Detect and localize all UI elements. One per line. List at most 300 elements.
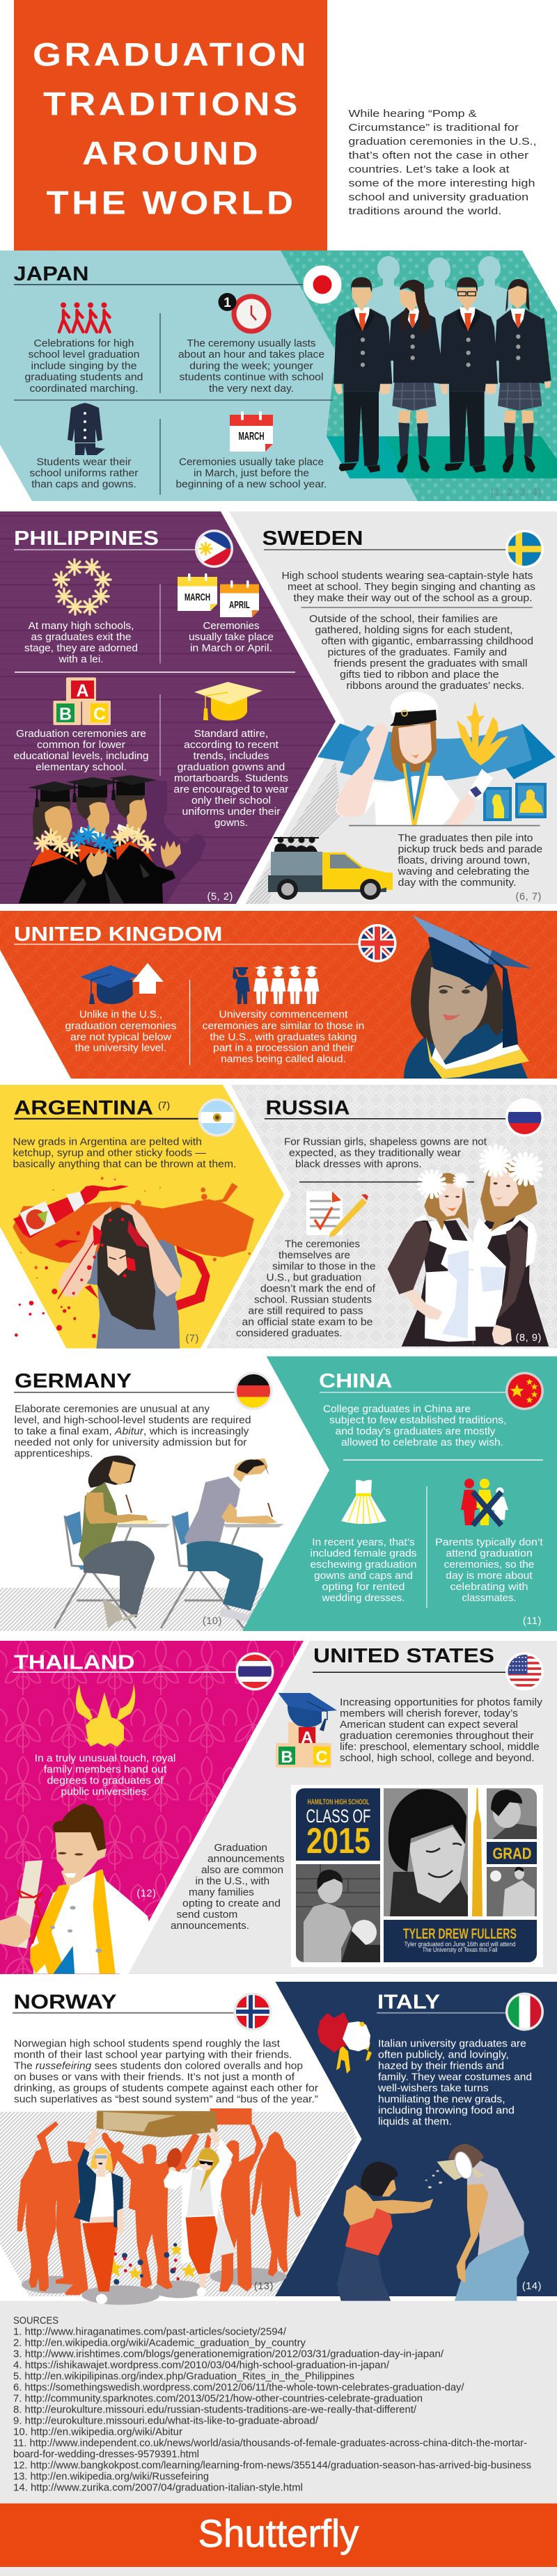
text: state exam: similar to those in the <box>272 1261 376 1272</box>
text: dresses: black dresses with aprons. <box>295 1159 422 1170</box>
text: parade: pickup truck beds and parade <box>398 844 542 855</box>
text: standard attire: mortarboards. Students <box>174 773 288 784</box>
text: wedding dresses: In recent years, that’s <box>312 1537 415 1548</box>
text: wedding dresses: eschewing graduation <box>311 1559 416 1571</box>
flag: russia <box>505 1098 544 1137</box>
text: sources <box>13 2315 531 2493</box>
text: state exam: an official state exam to be <box>242 1317 373 1328</box>
icon: march and april calendars: APRIL <box>229 600 250 611</box>
girl <box>87 1240 182 1349</box>
panel: germany <box>0 1370 284 1631</box>
text: italy: liquids at them. <box>378 2117 452 2128</box>
text: united states <box>340 1697 543 1764</box>
text: norway: Norwegian high school students spend roughly the last <box>14 2039 280 2050</box>
banner <box>96 2110 218 2138</box>
intro text: countries. Let’s take a look at <box>348 164 510 175</box>
text: singing and marching: include singing by the <box>31 360 136 372</box>
source: philippines: (5, 2) <box>207 891 233 903</box>
flag: china <box>505 1372 544 1410</box>
icon: lei <box>54 559 111 614</box>
flag: united states <box>505 1652 544 1691</box>
card: tassel <box>472 1788 483 1916</box>
right desk chair <box>161 1516 244 1628</box>
text: parade: waving and celebrating the <box>397 866 529 877</box>
icon: garuda <box>76 1684 135 1747</box>
panel: united states <box>128 1641 557 1974</box>
source: china: (11) <box>523 1616 542 1627</box>
illustration: russian girls in aprons <box>388 1146 549 1346</box>
text: university level: the university level. <box>75 1042 166 1054</box>
text: sources: 12. http://www.bangkokpost.com/learning/learning-from-news/355144/graduation-season-has-arrived-big-business <box>13 2460 531 2471</box>
text: lei: with a lei. <box>58 654 103 665</box>
icon: paint splats <box>317 2012 372 2074</box>
right student <box>185 1458 277 1623</box>
intro text: some of the more interesting high <box>348 178 535 189</box>
icon: exam paper and pencil <box>306 1191 368 1237</box>
text: united states: American student can expect several <box>340 1719 518 1731</box>
icon: march and april calendars: MARCH <box>185 592 210 603</box>
card: name: The University of Texas this Fall <box>422 1946 497 1953</box>
text: march or april <box>189 621 274 654</box>
text: march ceremonies: in March, just before the <box>194 468 309 479</box>
heading: thailand: THAILAND <box>14 1651 135 1673</box>
text: singing <box>281 571 535 604</box>
text: lower levels: educational levels, including <box>14 751 149 762</box>
text: commencement: University commencement <box>219 1009 348 1020</box>
text: march ceremonies: beginning of a new school year. <box>175 479 327 491</box>
heading: russia: RUSSIA <box>266 1097 350 1119</box>
text: families and gifts: pictures of the graduates. Family and <box>327 647 507 658</box>
title: THE WORLD <box>46 184 297 221</box>
source: thailand: (12) <box>136 1889 156 1900</box>
text: commencement <box>203 1009 364 1065</box>
flag: united kingdom <box>358 924 397 962</box>
icon: pickup truck <box>268 836 393 900</box>
flag: norway <box>234 1993 272 2030</box>
panel: sources background <box>0 2301 557 2576</box>
heading: sweden: SWEDEN <box>262 527 363 550</box>
card: name: Tyler graduated on June 16th and will attend <box>404 1941 515 1948</box>
icon: cap and blocks: B <box>281 1748 293 1767</box>
heading: italy: ITALY <box>377 1991 440 2014</box>
text: united states: graduation ceremonies throughout their <box>340 1731 534 1742</box>
text: standard attire: according to recent <box>184 740 278 751</box>
card: class of 2015: 2015 <box>306 1821 370 1861</box>
icon: marching students <box>59 302 110 332</box>
text: singing and marching: graduating students and <box>25 372 143 383</box>
text: italy: often publicly, and lovingly, <box>378 2050 509 2061</box>
girl with side-swept hair <box>389 280 441 472</box>
text: parents: ceremonies, so the <box>444 1559 534 1571</box>
megaphone <box>164 2147 187 2175</box>
icon: yellow mortarboard <box>194 682 262 721</box>
icon: march calendar <box>230 411 273 452</box>
text: norway: such superlatives as “best sound system” and “bus of the year.” <box>14 2094 318 2106</box>
title <box>33 36 309 221</box>
icon: march calendar: MARCH <box>238 431 265 443</box>
text: standard attire: trends, includes <box>194 751 269 762</box>
text: united states: members will cherish forever, today’s <box>340 1708 518 1719</box>
text: singing and marching: coordinated marching. <box>29 383 138 395</box>
heading: philippines: PHILIPPINES <box>14 527 159 550</box>
card: top right photo <box>487 1788 537 1839</box>
crowd shadows <box>22 2268 287 2305</box>
text: sources: 3. http://www.irishtimes.com/blogs/generationemigration/2012/03/31/graduation-day-in-japan/ <box>13 2348 444 2360</box>
text: germany: Elaborate ceremonies are unusual at any <box>15 1404 210 1415</box>
text: sources: 13. http://en.wikipedia.org/wiki/Russefeiring <box>13 2471 209 2482</box>
flag: sweden <box>505 530 544 568</box>
text: standard attire: uniforms under their <box>182 806 281 818</box>
text: announcements: announcements. <box>171 1921 249 1932</box>
flag: italy <box>505 1993 544 2030</box>
footer band <box>0 2504 557 2567</box>
text: university level: Unlike in the U.S., <box>79 1009 162 1020</box>
text: argentina: ketchup, syrup and other sticky foods — <box>13 1148 207 1159</box>
text: commencement: part in a procession and their <box>213 1042 354 1054</box>
text: families and gifts: friends present the graduates with small <box>334 658 528 669</box>
text: march or april: Ceremonies <box>203 621 259 632</box>
heading: japan: JAPAN <box>14 263 89 285</box>
text: standard attire: only their school <box>191 795 271 806</box>
source: japan: (1, 2, 3, 4) <box>491 487 542 498</box>
source superscript: argentina: (7) <box>158 1099 170 1111</box>
text: sources: 11. http://www.independent.co.uk/news/world/asia/thousands-of-female-graduates-across-china-ditch-the-mortar- <box>13 2438 527 2449</box>
text: thailand <box>35 1754 175 1798</box>
flag: thailand <box>235 1652 274 1691</box>
text: sources: 8. http://eurokulture.missouri.edu/russian-students-traditions-are-we-really-that-different/ <box>13 2404 417 2415</box>
text: parents: Parents typically don’t <box>435 1537 543 1548</box>
text: state exam: school. Russian students <box>254 1294 372 1305</box>
panel: china <box>242 1356 557 1631</box>
man hit by pie <box>425 2144 529 2301</box>
text: china: allowed to celebrate as they wish. <box>341 1437 503 1448</box>
text: united states: Increasing opportunities for photos family <box>340 1697 543 1708</box>
title: GRADUATION <box>33 36 309 72</box>
illustration: graduates with leis <box>19 775 206 903</box>
left girl <box>388 1173 480 1346</box>
text: parents <box>435 1537 543 1604</box>
text: dresses: For Russian girls, shapeless gowns are not <box>284 1137 487 1148</box>
intro text: that’s often not the case in other <box>348 150 528 161</box>
text: italy: including throwing food and <box>378 2106 515 2117</box>
text: families and gifts: gathered, holding signs for each student, <box>315 625 512 636</box>
text: norway: drinking, as groups of students compete against each other for <box>14 2083 318 2094</box>
text: standard attire: gowns. <box>214 818 248 829</box>
icon: abc blocks <box>53 678 111 725</box>
graduate three <box>109 775 157 835</box>
text: italy: well-wishers take turns <box>377 2083 489 2094</box>
text: lower levels: Graduation ceremonies are <box>16 729 146 740</box>
text: ceremony length: students continue with school <box>180 372 323 383</box>
text: china: and today’s graduates are mostly <box>336 1426 496 1437</box>
illustration: thai graduate <box>0 1804 149 1974</box>
text: germany: to take a final exam, Abitur, which is increasingly <box>14 1426 249 1437</box>
red splat ring <box>15 1231 210 1338</box>
flag: philippines <box>195 530 233 568</box>
text: parents: classmates. <box>462 1593 517 1604</box>
icon: abc blocks: C <box>93 704 106 724</box>
text: march or april: in March or April. <box>190 643 272 654</box>
text: announcements: send custom <box>177 1909 237 1921</box>
white hair flowers <box>418 1146 541 1198</box>
icon: clock: 1 <box>223 296 231 310</box>
girl in navy jacket <box>74 2128 124 2304</box>
text: norway: The russefeiring sees students don colored overalls and hop <box>14 2061 303 2072</box>
text: announcements <box>171 1843 285 1932</box>
text: march ceremonies: Ceremonies usually take place <box>179 457 324 468</box>
source: germany: (10) <box>203 1616 222 1627</box>
text: germany: apprenticeships. <box>14 1448 93 1459</box>
text: sources: 10. http://en.wikipedia.org/wiki/Abitur <box>13 2426 182 2438</box>
text: families and gifts: Outside of the school, their families are <box>309 614 498 625</box>
panel: japan <box>0 251 557 501</box>
text: germany: level, and high-school-level students are required <box>14 1415 251 1426</box>
text: norway: on buses or vans with their friends. It’s not just a month of <box>14 2072 295 2083</box>
text: announcements: also are common <box>201 1865 283 1876</box>
flag: japan <box>304 266 341 303</box>
text: thailand: public universities. <box>61 1787 149 1798</box>
card: grad: GRAD <box>493 1844 532 1862</box>
text: ceremony length <box>178 338 324 395</box>
girl facing forward <box>494 279 551 472</box>
text: state exam: are still required to pass <box>248 1305 363 1317</box>
intro text: graduation ceremonies in the U.S., <box>348 136 536 148</box>
card: grad <box>487 1842 537 1864</box>
text: united states: school, high school, college and beyond. <box>340 1753 535 1764</box>
intro text: traditions around the world. <box>348 206 501 217</box>
icon: school uniform <box>68 403 105 455</box>
text: singing: High school students wearing sea-captain-style hats <box>281 571 533 582</box>
text: announcements: in the U.S., with <box>195 1876 269 1887</box>
card: seated photo <box>296 1864 380 1962</box>
source: sweden: (6, 7) <box>516 891 542 903</box>
icon: no parents <box>461 1479 508 1525</box>
text: thailand: degrees to graduates of <box>47 1776 164 1787</box>
text: germany: needed not only for university admission but for <box>14 1437 247 1448</box>
icon: procession <box>233 966 319 1004</box>
icon: cap and blocks: A <box>301 1728 313 1747</box>
text: thailand: family members hand out <box>44 1765 166 1776</box>
announcement card <box>291 1785 543 1967</box>
woman throwing pie <box>337 2162 433 2301</box>
illustration: students taking exam <box>54 1456 284 1628</box>
ketchup bottle <box>13 1185 129 1238</box>
graduate one <box>28 781 81 842</box>
flag: argentina <box>198 1098 237 1137</box>
text: university level <box>65 1009 177 1054</box>
text: sources: 1. http://www.hiraganatimes.com/past-articles/society/2594/ <box>13 2326 287 2337</box>
icon: cap and blocks: C <box>315 1748 328 1767</box>
illustration: photos of childhood <box>483 783 547 821</box>
text: united states: life: preschool, elementary school, middle <box>340 1742 540 1753</box>
source: norway: (13) <box>254 2281 274 2292</box>
text: argentina: basically anything that can be thrown at them. <box>13 1159 237 1170</box>
text: sources: 14. http://www.zurika.com/2007/04/graduation-italian-style.html <box>13 2482 303 2493</box>
card: class of 2015: CLASS OF <box>306 1806 370 1827</box>
text: announcements: opting to create and <box>182 1898 281 1909</box>
text: state exam: The ceremonies <box>285 1239 360 1250</box>
text: state exam: themselves are <box>278 1250 350 1261</box>
text: china <box>323 1404 507 1448</box>
text: singing and marching: school level graduation <box>28 349 139 360</box>
source: russia: (8, 9) <box>516 1333 542 1344</box>
illustration: graduate with captain hat <box>336 692 493 825</box>
intro text: Circumstance” is traditional for <box>348 122 519 134</box>
text: families and gifts: ribbons around the graduates’ necks. <box>347 681 524 692</box>
logo: shutterfly: Shutterfly <box>198 2511 359 2555</box>
text: lower levels: common for lower <box>37 740 125 751</box>
illustration: students in uniform <box>334 277 551 472</box>
card: portrait <box>384 1788 468 1916</box>
text: sources: SOURCES <box>13 2315 58 2326</box>
text: ceremony length: about an hour and takes place <box>178 349 324 360</box>
heading: argentina: ARGENTINA <box>14 1097 153 1119</box>
text: lower levels: elementary school. <box>36 762 127 773</box>
graduate two <box>66 777 120 842</box>
text: sources: board-for-wedding-dresses-9579391.html <box>13 2449 199 2460</box>
silhouettes behind students <box>365 256 512 455</box>
icon: clock <box>219 293 272 334</box>
text: ceremony length: The ceremony usually lasts <box>187 338 316 349</box>
text: march or april: usually take place <box>189 632 274 643</box>
text: standard attire: graduation gowns and <box>178 762 285 773</box>
text: wedding dresses: gowns and caps and <box>314 1571 413 1582</box>
confetti <box>104 2243 197 2284</box>
panel: philippines <box>0 511 336 904</box>
panel: norway <box>0 1991 357 2296</box>
text: standard attire: are encouraged to wear <box>174 784 289 795</box>
text: lei: At many high schools, <box>28 621 134 632</box>
panel: italy <box>275 1982 557 2296</box>
text: school uniforms <box>29 457 139 491</box>
text: commencement: the U.S., with graduates taking <box>210 1032 356 1043</box>
icon: abc blocks: B <box>59 704 72 724</box>
text: wedding dresses: included female grads <box>311 1548 416 1559</box>
text: parents: day is more about <box>446 1571 533 1582</box>
text: parade: The graduates then pile into <box>398 833 533 844</box>
text: parade: day with the community. <box>398 877 517 889</box>
card: soccer photo <box>487 1867 537 1916</box>
text: china: College graduates in China are <box>323 1404 471 1415</box>
text: ceremony length: the very next day. <box>209 383 294 395</box>
icon: cap and blocks <box>276 1693 337 1767</box>
text: school uniforms: school uniforms rather <box>29 468 139 479</box>
text: sources: 9. http://eurokulture.missouri.edu/what-its-like-to-graduate-abroad/ <box>13 2415 319 2426</box>
text: announcements: Graduation <box>214 1843 267 1854</box>
title: TRADITIONS <box>43 85 301 122</box>
text: state exam: doesn’t mark the end of <box>260 1283 376 1294</box>
text: argentina <box>13 1137 237 1170</box>
text: italy: Italian university graduates are <box>378 2039 526 2050</box>
text: parade <box>397 833 542 889</box>
text: singing: they make their way out of the school as a group. <box>294 593 532 604</box>
icon: cap and up arrow <box>80 963 164 1004</box>
illustration: ketchup scene <box>13 1177 254 1349</box>
title: AROUND <box>82 135 261 171</box>
orange splat <box>13 1177 254 1279</box>
text: italy <box>377 2039 532 2128</box>
heading: germany: GERMANY <box>15 1370 132 1392</box>
text: norway <box>14 2039 318 2106</box>
text: sources: 4. https://ishikawajet.wordpress.com/2010/03/04/high-school-graduation-in-japan/ <box>13 2360 390 2371</box>
panel: thailand <box>0 1641 304 1974</box>
icon: abc blocks: A <box>76 681 89 701</box>
heading: norway: NORWAY <box>14 1991 117 2014</box>
text: wedding dresses <box>311 1537 416 1604</box>
card: class of 2015: HAMILTON HIGH SCHOOL <box>308 1798 370 1806</box>
text: commencement: names being called aloud. <box>221 1054 346 1065</box>
text: sources: 7. http://community.sparknotes.com/2013/05/21/how-other-countries-celebrate-graduation <box>13 2393 423 2404</box>
text: march ceremonies <box>175 457 327 491</box>
leis <box>35 825 155 858</box>
text: state exam <box>236 1239 376 1339</box>
text: thailand: In a truly unusual touch, royal <box>35 1754 175 1765</box>
icon: wedding dress <box>341 1480 386 1524</box>
text: announcements: announcements <box>207 1854 285 1865</box>
intro text <box>348 109 536 217</box>
text: singing: meet at school. They begin singing and chanting as <box>288 582 535 593</box>
text: families and gifts <box>309 614 533 692</box>
text: sources: 2. http://en.wikipedia.org/wiki/Academic_graduation_by_country <box>13 2337 306 2348</box>
text: university level: are not typical below <box>70 1032 172 1043</box>
text: sources: 5. http://en.wikipilipinas.org/index.php/Graduation_Rites_in_the_Philippines <box>13 2371 354 2382</box>
intro text: While hearing “Pomp & <box>348 109 477 120</box>
icon: march and april calendars <box>178 573 259 617</box>
heading: united kingdom: UNITED KINGDOM <box>14 923 223 946</box>
text: state exam: considered graduates. <box>236 1328 343 1339</box>
heading: china: CHINA <box>319 1370 393 1392</box>
left student <box>79 1456 160 1628</box>
illustration: ribbon banner <box>317 724 556 782</box>
text: norway: month of their last school year partying with their friends. <box>14 2050 292 2061</box>
hands <box>86 841 181 877</box>
text: argentina: New grads in Argentina are pelted with <box>13 1137 202 1148</box>
illustration: yellow flowers <box>457 701 508 765</box>
illustration: italian graduates <box>337 2144 529 2301</box>
source: argentina: (7) <box>185 1333 199 1344</box>
floor <box>327 436 557 479</box>
source: italy: (14) <box>522 2281 542 2292</box>
card: name <box>384 1920 537 1962</box>
flag: germany <box>234 1372 273 1410</box>
intro text: school and university graduation <box>348 192 528 203</box>
panel: sweden <box>229 511 557 904</box>
text: dresses <box>284 1137 487 1170</box>
text: families and gifts: gifts tied to ribbon and place the <box>340 669 499 681</box>
text: singing and marching <box>25 338 143 395</box>
text: parents: attend graduation <box>446 1548 533 1559</box>
panel: russia <box>206 1085 557 1349</box>
text: china: subject to few established traditions, <box>329 1415 507 1426</box>
text: university level: graduation ceremonies <box>65 1021 177 1032</box>
text: germany <box>14 1404 251 1459</box>
text: wedding dresses: opting for rented <box>322 1582 405 1593</box>
text: lei: as graduates exit the <box>31 632 131 643</box>
heading: united states: UNITED STATES <box>313 1645 494 1667</box>
text: wedding dresses: wedding dresses. <box>321 1593 405 1604</box>
illustration: norway crowd <box>17 2108 301 2305</box>
right girl <box>473 1160 549 1346</box>
text: lei <box>24 621 138 665</box>
card: class of 2015 <box>296 1788 380 1861</box>
text: commencement: ceremonies are similar to those in <box>203 1021 364 1032</box>
text: singing and marching: Celebrations for high <box>33 338 134 349</box>
text: italy: family. They wear costumes and <box>378 2072 532 2083</box>
illustration: uk graduate <box>404 915 531 1079</box>
panel: argentina <box>0 1085 284 1349</box>
panel: united kingdom <box>0 911 557 1079</box>
text: lower levels <box>14 729 149 773</box>
